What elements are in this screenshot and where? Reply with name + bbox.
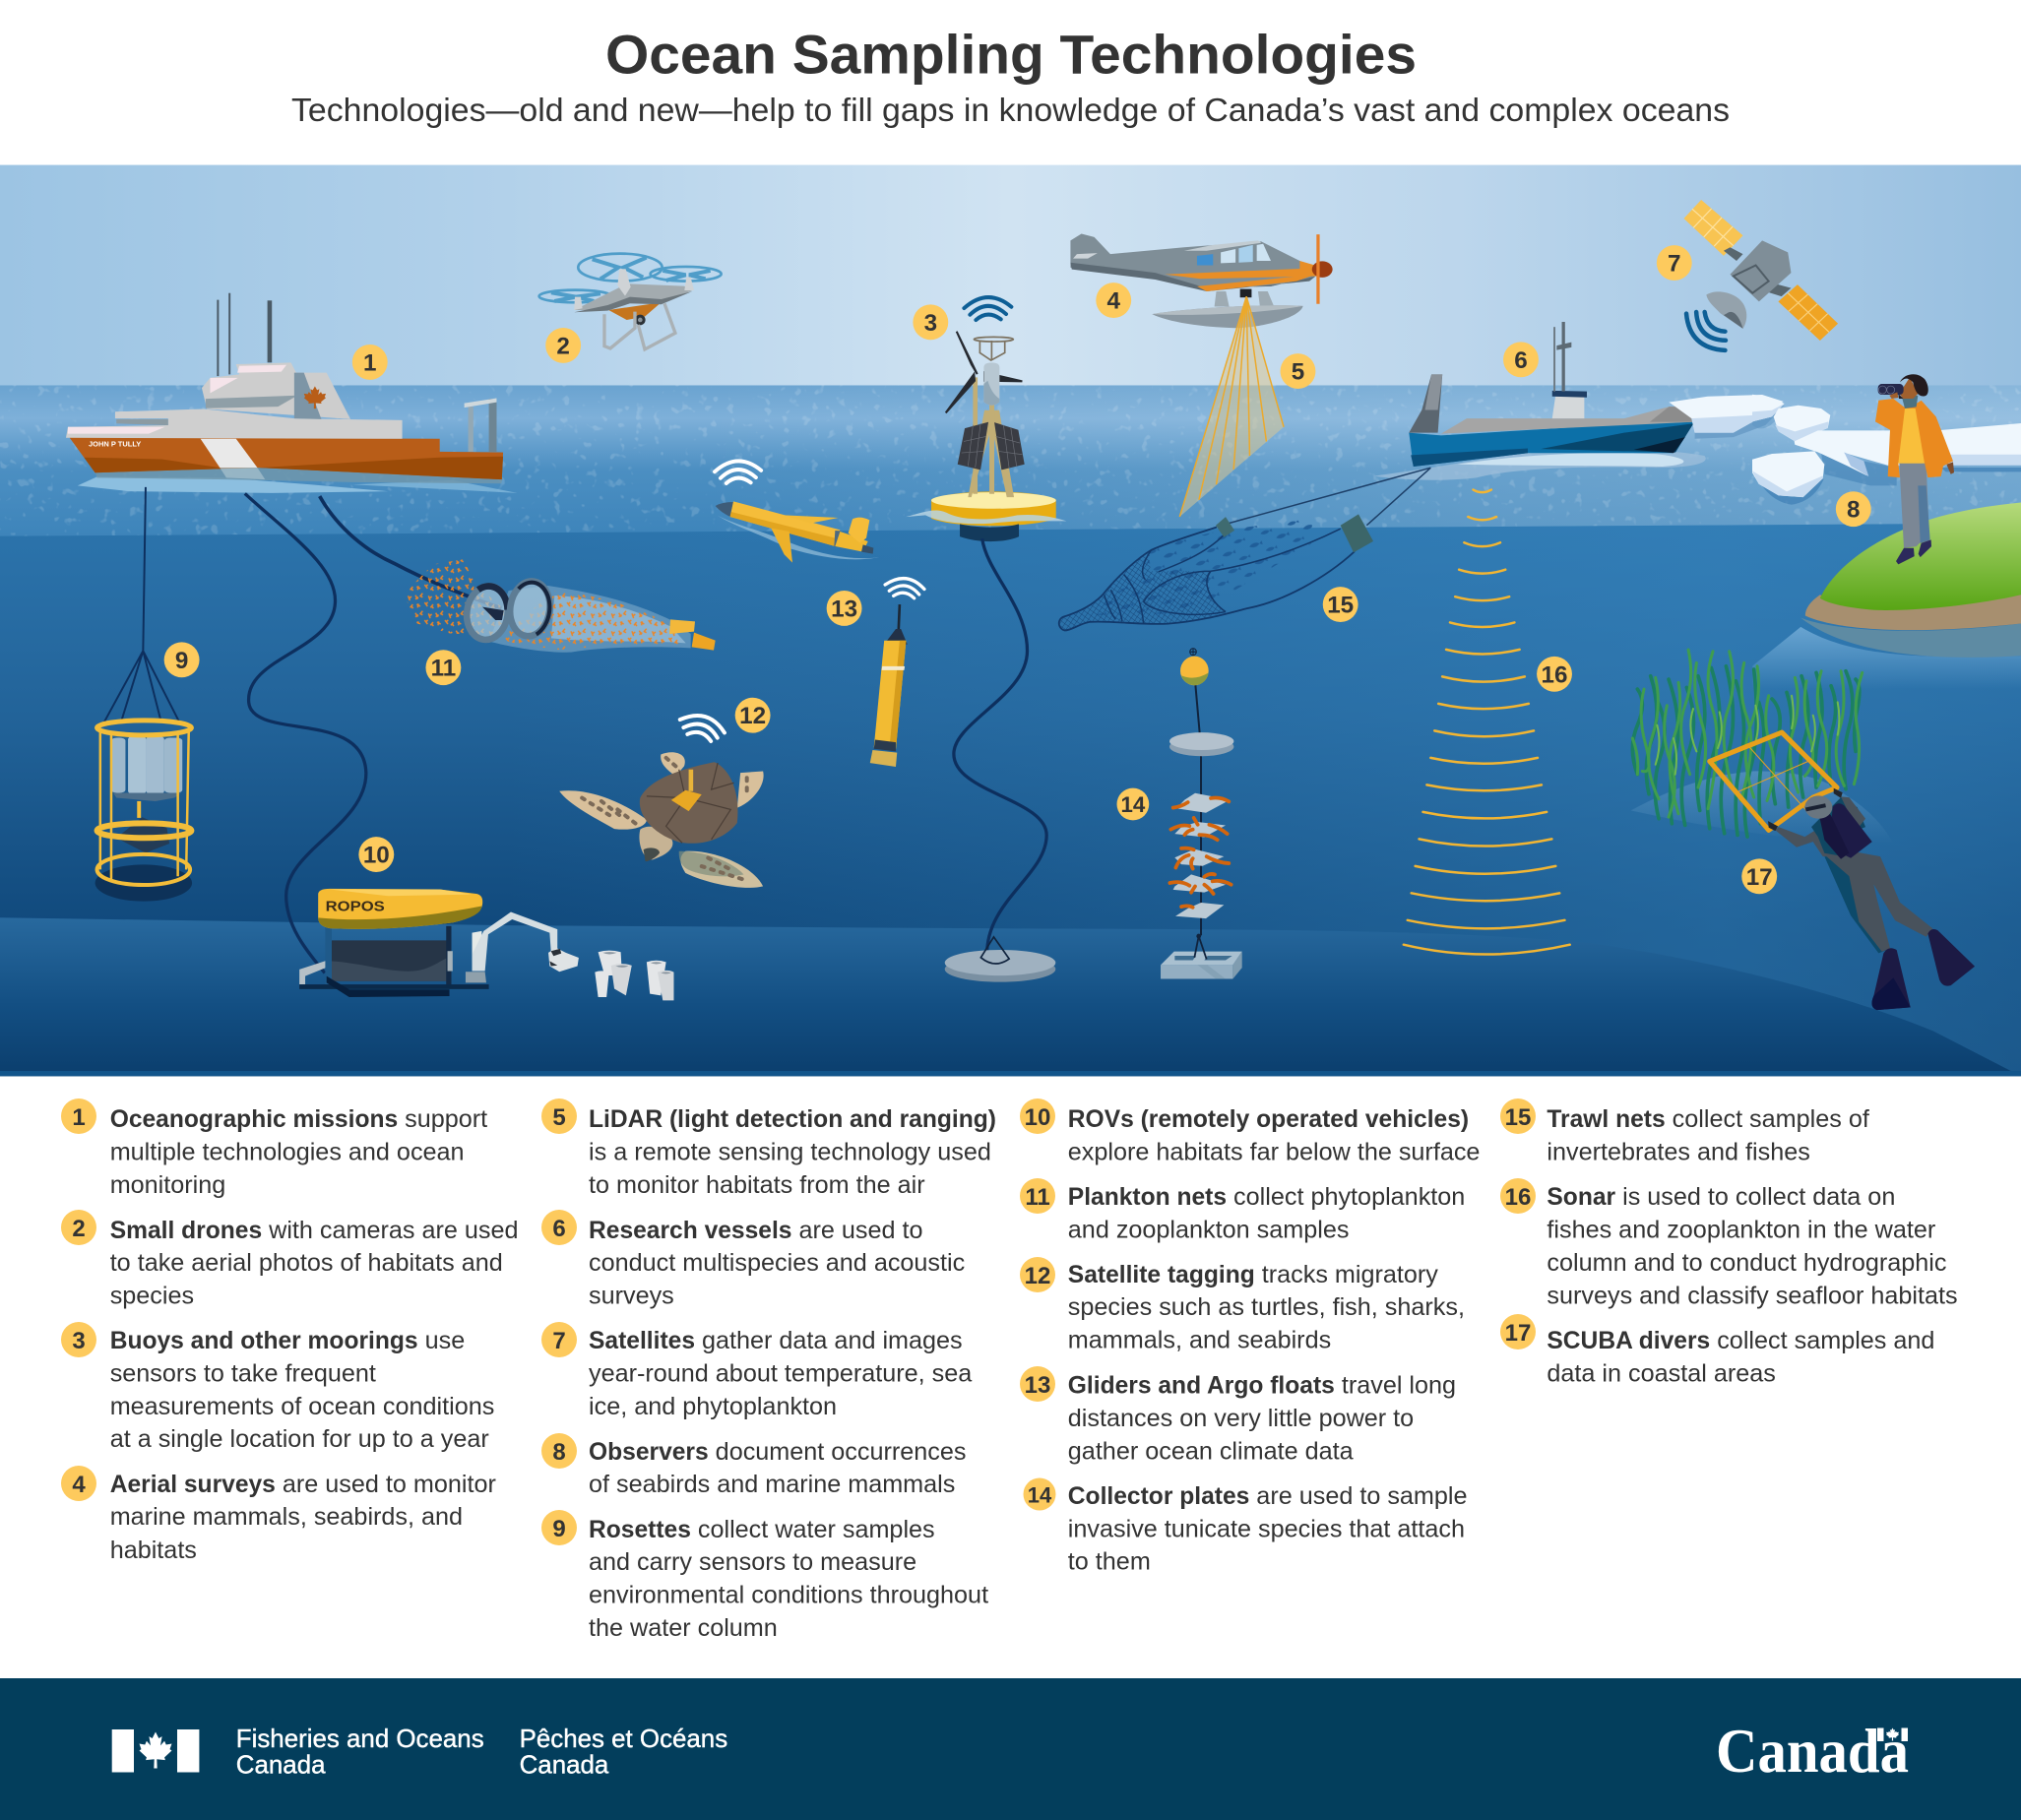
legend item 6: conduct multispecies and acoustic bbox=[589, 1249, 965, 1277]
background: sky bbox=[0, 165, 2021, 387]
badge 9 bbox=[164, 642, 200, 677]
legend item 1: Oceanographic missions support bbox=[110, 1105, 487, 1133]
icon: ice floes bbox=[1669, 395, 2021, 505]
legend item 17: data in coastal areas bbox=[1547, 1360, 1776, 1388]
legend item 7: Satellites gather data and images bbox=[589, 1327, 963, 1354]
legend item 13 bbox=[1020, 1366, 1456, 1465]
badge 2 bbox=[545, 328, 581, 363]
legend item 16: surveys and classify seafloor habitats bbox=[1547, 1282, 1958, 1309]
legend item 17: SCUBA divers collect samples and bbox=[1547, 1327, 1934, 1354]
icon: float signal bbox=[884, 576, 925, 600]
icon: ROV tether cable bbox=[245, 493, 366, 973]
legend item 14: invasive tunicate species that attach bbox=[1068, 1515, 1465, 1542]
legend item 12: 12 bbox=[1025, 1263, 1050, 1289]
badge 1 bbox=[352, 345, 388, 380]
badge 10 bbox=[358, 837, 394, 872]
legend item 3 bbox=[61, 1322, 494, 1453]
legend item 3: sensors to take frequent bbox=[110, 1360, 376, 1388]
badge 12 bbox=[735, 698, 771, 733]
legend item 11: Plankton nets collect phytoplankton bbox=[1068, 1183, 1465, 1211]
icon: quadrat frame bbox=[1710, 732, 1837, 830]
legend item 5: LiDAR (light detection and ranging) bbox=[589, 1106, 996, 1133]
illustration 2: small drone bbox=[539, 254, 722, 349]
illustration 4: float plane bbox=[1070, 233, 1333, 328]
legend item 12: species such as turtles, fish, sharks, bbox=[1068, 1293, 1465, 1321]
badge 9: 9 bbox=[175, 648, 188, 674]
legend item 6 bbox=[541, 1210, 965, 1309]
legend item 6: 6 bbox=[552, 1216, 566, 1242]
panel: footer bbox=[0, 1678, 2021, 1820]
badge 16 bbox=[1537, 657, 1572, 692]
legend item 16: column and to conduct hydrographic bbox=[1547, 1249, 1946, 1277]
icon: glider signal bbox=[715, 461, 761, 483]
legend item 3: Buoys and other moorings use bbox=[110, 1327, 465, 1354]
icon: buoy cable and anchor bbox=[945, 538, 1055, 982]
badge 1: 1 bbox=[363, 349, 377, 376]
legend item 2: 2 bbox=[72, 1216, 86, 1242]
badge 15 bbox=[1323, 587, 1358, 622]
legend item 4: 4 bbox=[72, 1472, 86, 1498]
department name, French bbox=[520, 1726, 727, 1780]
legend item 2: Small drones with cameras are used bbox=[110, 1217, 519, 1244]
department name, French: Pêches et Océans bbox=[520, 1726, 727, 1753]
legend item 6: surveys bbox=[589, 1282, 674, 1309]
legend item 4: Aerial surveys are used to monitor bbox=[110, 1471, 496, 1498]
background: seafloor bbox=[0, 917, 2021, 1076]
badge 13: 13 bbox=[831, 596, 857, 623]
legend item 9: environmental conditions throughout bbox=[589, 1581, 988, 1608]
badge 11 bbox=[425, 650, 461, 685]
legend item 14: 14 bbox=[1028, 1482, 1052, 1508]
legend item 16 bbox=[1500, 1178, 1958, 1309]
legend item 13: Gliders and Argo floats travel long bbox=[1068, 1372, 1456, 1400]
label: ROPOS: ROPOS bbox=[326, 899, 385, 915]
legend item 11: 11 bbox=[1025, 1184, 1050, 1211]
legend item 1: multiple technologies and ocean bbox=[110, 1138, 465, 1165]
legend item 1 bbox=[61, 1098, 487, 1199]
legend item 9: 9 bbox=[552, 1516, 566, 1542]
legend item 3: 3 bbox=[72, 1328, 86, 1354]
legend item 12: Satellite tagging tracks migratory bbox=[1068, 1261, 1438, 1288]
illustration 9: rosette bbox=[95, 487, 192, 902]
department name, French: Canada bbox=[520, 1752, 609, 1780]
Canada wordmark: Canada bbox=[1716, 1716, 1909, 1786]
legend item 9: Rosettes collect water samples bbox=[589, 1516, 935, 1543]
legend item 2: species bbox=[110, 1282, 194, 1309]
legend item 8: 8 bbox=[552, 1439, 566, 1466]
department name, English: Canada bbox=[236, 1752, 326, 1780]
legend item 4: habitats bbox=[110, 1537, 197, 1564]
badge 5: 5 bbox=[1292, 359, 1304, 386]
legend item 3: at a single location for up to a year bbox=[110, 1425, 489, 1453]
footer background bbox=[0, 1678, 2021, 1820]
badge 3: 3 bbox=[924, 310, 937, 337]
illustration 13: Argo float bbox=[870, 604, 908, 767]
legend item 5 bbox=[541, 1098, 996, 1199]
illustration 1: research ship John P Tully bbox=[66, 293, 518, 493]
legend item 5: to monitor habitats from the air bbox=[589, 1171, 925, 1199]
badge 8: 8 bbox=[1847, 497, 1861, 524]
legend item 16: fishes and zooplankton in the water bbox=[1547, 1216, 1935, 1243]
legend item 11: and zooplankton samples bbox=[1068, 1216, 1349, 1243]
legend item 12: mammals, and seabirds bbox=[1068, 1327, 1331, 1354]
legend item 9 bbox=[541, 1510, 988, 1642]
badge 7: 7 bbox=[1668, 251, 1681, 278]
legend item 10: ROVs (remotely operated vehicles) bbox=[1068, 1106, 1469, 1133]
legend item 8: of seabirds and marine mammals bbox=[589, 1471, 955, 1498]
legend item 10: 10 bbox=[1025, 1104, 1050, 1131]
legend item 10 bbox=[1020, 1098, 1480, 1165]
legend item 13: gather ocean climate data bbox=[1068, 1437, 1355, 1465]
badge 13 bbox=[827, 591, 862, 626]
icon: observer with binoculars bbox=[1875, 374, 1954, 564]
icon: island bbox=[1752, 503, 2021, 689]
badge 8 bbox=[1836, 491, 1871, 527]
scene number badges bbox=[164, 245, 1871, 894]
legend item 2 bbox=[61, 1210, 519, 1309]
legend item 14 bbox=[1024, 1478, 1468, 1576]
badge 2: 2 bbox=[556, 333, 570, 359]
icon: Government of Canada flag bbox=[112, 1729, 199, 1772]
legend item 1: monitoring bbox=[110, 1171, 225, 1199]
illustration 3: moored buoy with turbine and solar panels bbox=[906, 297, 1066, 541]
badge 16: 16 bbox=[1542, 661, 1567, 688]
legend item 6: Research vessels are used to bbox=[589, 1217, 923, 1244]
legend item 9: and carry sensors to measure bbox=[589, 1548, 916, 1576]
illustration: sponges on seafloor bbox=[595, 951, 673, 1000]
illustration 16: sonar pings bbox=[1404, 490, 1570, 955]
legend item 9: the water column bbox=[589, 1614, 778, 1642]
legend item 3: measurements of ocean conditions bbox=[110, 1393, 494, 1420]
illustration 1: research ship John P Tully: JOHN P TULLY bbox=[89, 440, 141, 449]
background: deep water bbox=[0, 524, 2021, 1076]
illustration 8: sea ice, island and observer bbox=[1669, 374, 2021, 689]
legend item 2: to take aerial photos of habitats and bbox=[110, 1249, 503, 1277]
legend item 15: 15 bbox=[1505, 1104, 1531, 1131]
icon: turtle signal bbox=[676, 710, 727, 745]
legend item 12 bbox=[1020, 1257, 1465, 1354]
badge 7 bbox=[1657, 245, 1692, 281]
title: Ocean Sampling Technologies bbox=[605, 24, 1417, 85]
legend item 15: invertebrates and fishes bbox=[1547, 1138, 1810, 1165]
badge 6: 6 bbox=[1514, 347, 1528, 374]
icon: SCUBA diver bbox=[1768, 788, 1975, 1010]
badge 5 bbox=[1281, 353, 1315, 389]
legend item 8: Observers document occurrences bbox=[589, 1438, 967, 1466]
legend item 17: 17 bbox=[1505, 1320, 1531, 1347]
illustration 11: plankton net bbox=[320, 496, 716, 653]
badge 3 bbox=[913, 304, 948, 340]
legend item 7: ice, and phytoplankton bbox=[589, 1393, 837, 1420]
illustration 17: seagrass, quadrat and SCUBA diver bbox=[1631, 650, 1975, 1010]
department name, English bbox=[236, 1726, 484, 1780]
badge 17 bbox=[1741, 858, 1777, 894]
legend item 15 bbox=[1500, 1098, 1870, 1165]
legend item 13: distances on very little power to bbox=[1068, 1405, 1414, 1432]
department name, English: Fisheries and Oceans bbox=[236, 1726, 484, 1753]
badge 4: 4 bbox=[1106, 288, 1120, 315]
illustration 14: collector plates bbox=[1161, 649, 1242, 978]
panel: ocean scene bbox=[0, 165, 2021, 1076]
illustration 6: research vessel bbox=[1373, 322, 1706, 480]
badge 11: 11 bbox=[431, 656, 456, 682]
badge 14: 14 bbox=[1120, 792, 1146, 817]
legend item 7: year-round about temperature, sea bbox=[589, 1360, 973, 1388]
illustration 13: underwater glider bbox=[716, 501, 879, 563]
illustration 15: trawl net with fish bbox=[1059, 468, 1430, 630]
legend item 1: 1 bbox=[72, 1104, 86, 1131]
legend item 14: Collector plates are used to sample bbox=[1068, 1482, 1468, 1510]
panel: numbered legend bbox=[61, 1098, 1958, 1642]
badge 15: 15 bbox=[1327, 593, 1354, 619]
legend item 5: 5 bbox=[552, 1104, 566, 1131]
legend item 17 bbox=[1500, 1314, 1934, 1388]
legend item 16: 16 bbox=[1505, 1184, 1531, 1211]
legend item 4 bbox=[61, 1466, 496, 1564]
badge 17: 17 bbox=[1746, 864, 1773, 891]
legend item 7 bbox=[541, 1322, 973, 1420]
legend item 10: explore habitats far below the surface bbox=[1068, 1138, 1480, 1165]
background: upper sea bbox=[0, 385, 2021, 537]
legend item 5: is a remote sensing technology used bbox=[589, 1138, 991, 1165]
badge 12: 12 bbox=[739, 703, 766, 729]
legend item 8 bbox=[541, 1433, 967, 1498]
icon: seagrass bbox=[1632, 650, 1863, 837]
badge 14 bbox=[1117, 788, 1149, 820]
legend item 13: 13 bbox=[1025, 1372, 1050, 1399]
legend item 4: marine mammals, seabirds, and bbox=[110, 1503, 463, 1531]
badge 4 bbox=[1096, 282, 1131, 318]
illustration 5: LiDAR beam bbox=[1179, 296, 1284, 517]
badge 6 bbox=[1503, 342, 1539, 377]
illustration 7: satellite bbox=[1678, 200, 1838, 359]
legend item 14: to them bbox=[1068, 1548, 1151, 1576]
illustration 10: ROPOS remotely operated vehicle bbox=[299, 889, 579, 997]
legend item 7: 7 bbox=[552, 1328, 566, 1354]
badge 10: 10 bbox=[363, 843, 390, 869]
subtitle: Technologies—old and new—help to fill gaps in knowledge of Canada’s vast and complex oceans bbox=[291, 93, 1730, 129]
illustration 12: tagged sea turtle bbox=[559, 752, 764, 888]
legend item 15: Trawl nets collect samples of bbox=[1547, 1105, 1870, 1133]
legend item 16: Sonar is used to collect data on bbox=[1547, 1183, 1895, 1211]
legend item 11 bbox=[1020, 1178, 1465, 1243]
